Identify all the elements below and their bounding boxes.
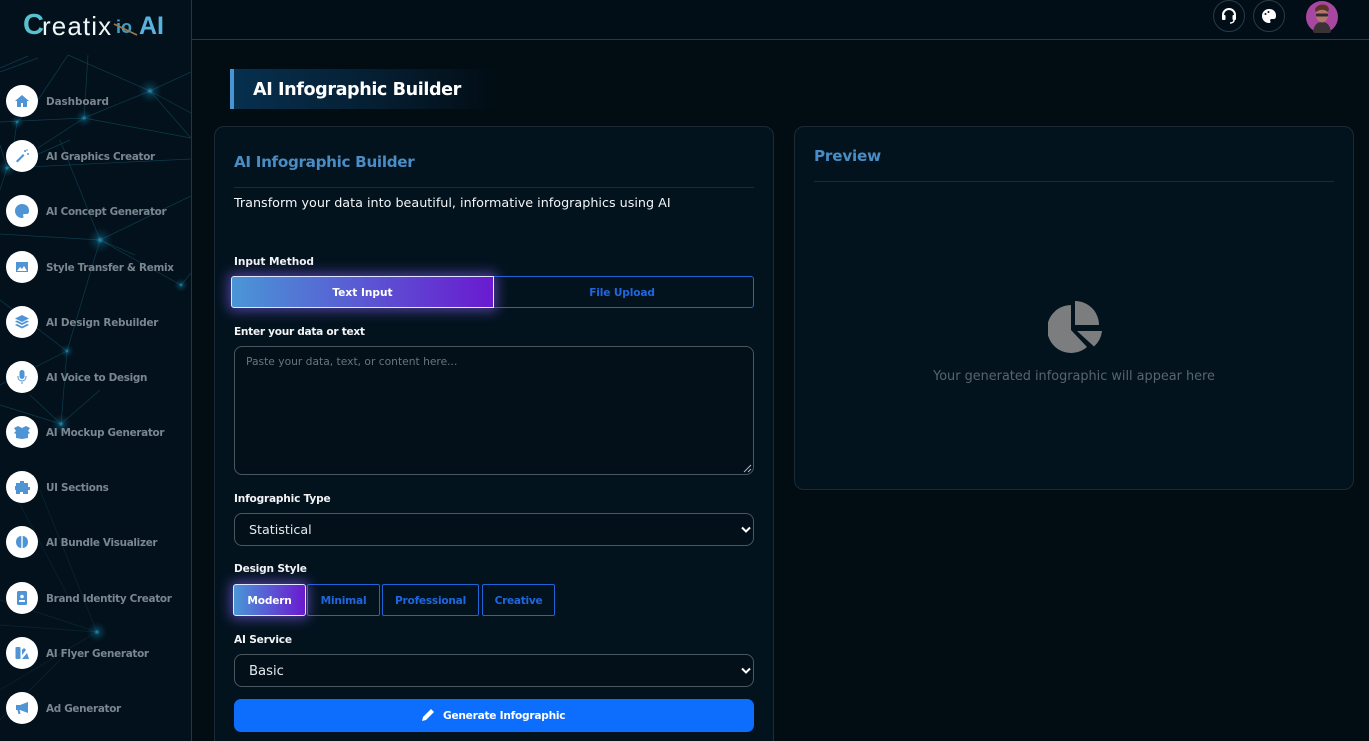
menu: Ad Generator: Ad Generator: [46, 703, 121, 715]
logo: [23, 9, 164, 41]
menu: Ad Generator: [6, 692, 122, 724]
placeholder: Paste your data, text, or content here...: [246, 355, 457, 368]
option: minimal: Minimal: [321, 595, 366, 607]
menu: AI Bundle Visualizer: [6, 526, 158, 558]
menu: AI Voice to Design: [6, 361, 147, 393]
menu: AI Mockup Generator: AI Mockup Generator: [46, 427, 164, 439]
menu: AI Voice to Design: AI Voice to Design: [46, 372, 147, 384]
menu: AI Concept Generator: AI Concept Generator: [46, 206, 166, 218]
tab: file upload: [490, 276, 754, 308]
label: input method: Input Method: [234, 256, 314, 268]
panel: builder form: [214, 126, 774, 741]
chevron: [741, 668, 751, 674]
menu: AI Design Rebuilder: AI Design Rebuilder: [46, 317, 158, 329]
logo mark C: C: [23, 9, 44, 41]
menu: Brand Identity Creator: [6, 582, 172, 614]
generate button: [234, 699, 754, 732]
menu: Style Transfer & Remix: Style Transfer & Remix: [46, 262, 174, 274]
page title: AI Infographic Builder: [253, 80, 461, 100]
avatar: [1306, 1, 1338, 33]
menu: AI Concept Generator: [6, 195, 167, 227]
label: style: Design Style: [234, 563, 307, 575]
description: Transform your data into beautiful, informative infographics using AI: [234, 196, 671, 211]
top bar: [192, 0, 1369, 40]
logo word: reatix: [42, 11, 112, 41]
sidebar network background: [0, 54, 191, 720]
panel heading: AI Infographic Builder: [234, 153, 414, 171]
menu: AI Mockup Generator: [6, 416, 164, 448]
menu: AI Graphics Creator: AI Graphics Creator: [46, 151, 155, 163]
icon: support headset: [1213, 0, 1245, 32]
icon: palette: [1253, 0, 1285, 32]
logo brush: [114, 23, 138, 36]
option: professional: Professional: [395, 595, 466, 607]
label: type: Infographic Type: [234, 493, 330, 505]
menu: AI Flyer Generator: AI Flyer Generator: [46, 648, 149, 660]
select: type: [234, 513, 754, 546]
menu: AI Design Rebuilder: [6, 306, 158, 338]
icon: pie chart: [1048, 301, 1102, 353]
option: modern: Modern: [247, 595, 292, 607]
value: Statistical: [249, 522, 312, 537]
logo AI: AI: [139, 12, 164, 40]
menu: UI Sections: [6, 471, 109, 503]
preview heading: Preview: [814, 147, 881, 165]
tab: text input: [231, 276, 494, 308]
placeholder text: Your generated infographic will appear here: [933, 369, 1215, 384]
menu: Style Transfer & Remix: [6, 251, 174, 283]
label: service: AI Service: [234, 634, 292, 646]
panel: preview: [794, 126, 1354, 490]
page heading: [230, 69, 500, 109]
option: modern: [233, 584, 306, 616]
option: creative: [482, 584, 555, 616]
icon: pencil: [422, 709, 434, 721]
menu: Dashboard: Dashboard: [46, 96, 109, 108]
menu: AI Graphics Creator: [6, 140, 156, 172]
menu: UI Sections: UI Sections: [46, 482, 109, 494]
menu: Brand Identity Creator: Brand Identity Creator: [46, 593, 172, 605]
textarea: [234, 346, 754, 475]
menu: AI Bundle Visualizer: AI Bundle Visualizer: [46, 537, 157, 549]
sidebar: [0, 0, 192, 741]
option: professional: [382, 584, 479, 616]
menu: AI Flyer Generator: [6, 637, 149, 669]
tab: file upload: File Upload: [589, 287, 655, 299]
logo io: io: [116, 17, 132, 37]
label: data: Enter your data or text: [234, 326, 365, 338]
option: minimal: [307, 584, 380, 616]
option: creative: Creative: [495, 595, 542, 607]
chevron: [741, 526, 751, 533]
resize handle: [744, 464, 752, 472]
tab: text input: Text Input: [332, 287, 393, 299]
select: service: [234, 654, 754, 687]
button label: Generate Infographic: [443, 710, 565, 722]
value: Basic: [249, 664, 284, 679]
menu: Dashboard: [6, 85, 109, 117]
